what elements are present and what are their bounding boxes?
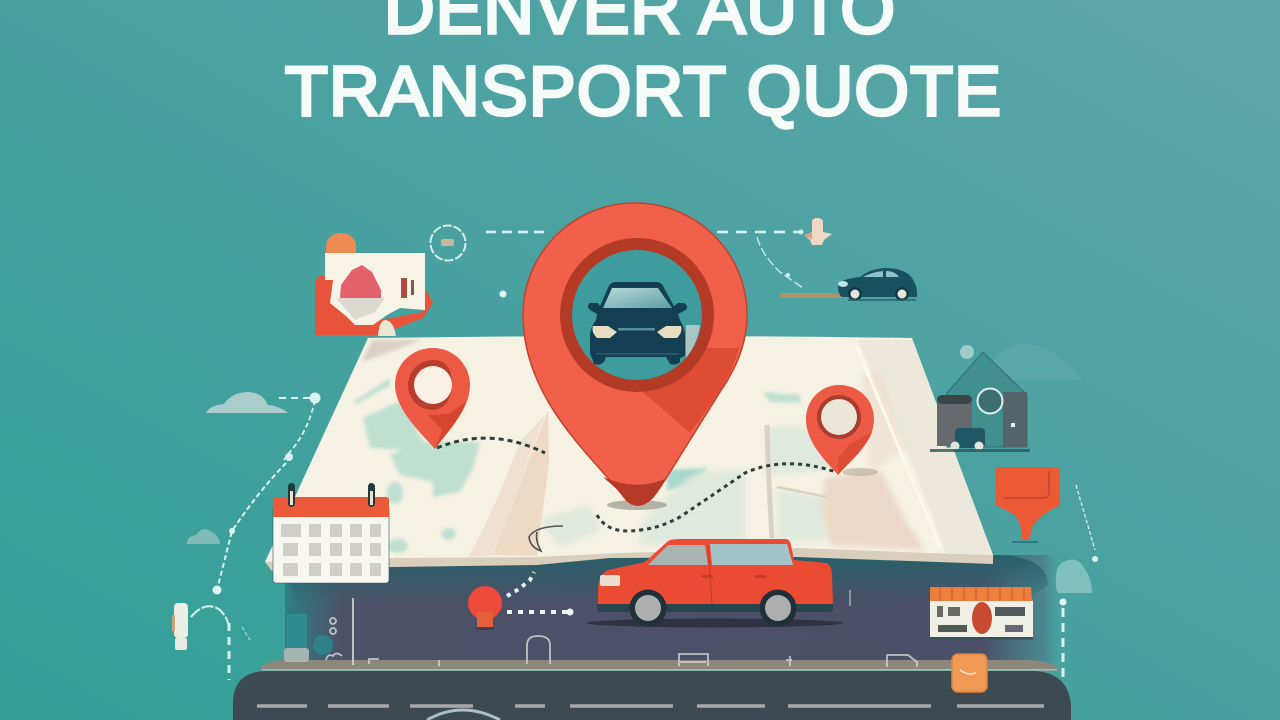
lower trim [597,604,833,612]
pin shaded fold [637,348,739,433]
icon: price sign [930,587,1033,640]
red car [587,539,843,628]
street area behind map [285,555,1060,663]
icon: illustrated card [315,233,433,336]
calendar rings [288,483,375,507]
icon: calendar [273,483,389,583]
wheel arc on road [427,710,500,720]
fold: tan strip [468,410,549,557]
map sheet [265,336,993,562]
calendar grid [281,524,381,576]
cloud lower left [187,529,220,544]
faded cloud [990,344,1082,380]
small mark on street right [849,590,851,606]
headlight [600,575,620,586]
fold shading left top [362,340,422,362]
small pin right [806,385,878,476]
wheels [630,590,666,626]
title: TRANSPORT QUOTE [285,52,1001,130]
icon: house with garage [930,344,1082,452]
pin tip shade [603,477,667,505]
dashed connector to road right [1060,598,1066,680]
pin shadow [842,468,878,476]
foreground road [233,671,1071,720]
icon: speech marker [995,467,1060,543]
icon: teal car [780,268,917,301]
car shadow [587,618,843,628]
dotted route left [437,438,545,453]
lane dashes [257,704,1044,708]
car windows [648,545,708,565]
red backing [315,275,433,335]
cream tab [378,320,396,336]
pin shadow [607,500,667,510]
tan map patches [822,370,925,550]
road furniture line icons [284,598,917,667]
title [285,0,1001,130]
left clouds and connectors [187,392,320,594]
pale green-grey map panels [540,427,832,548]
icon: hand marker [798,218,832,245]
right panel [857,340,993,555]
orange tab [326,233,356,253]
white card [325,253,425,325]
sidewalk strip [259,660,1062,670]
pin body [523,203,747,505]
map roads [767,347,940,547]
icon: orange box [952,654,987,692]
small pin left [395,348,470,449]
dot [500,290,506,298]
car body [598,539,833,605]
map edge thickness [265,540,993,571]
green map patches [353,378,800,553]
calendar header [273,497,389,517]
folded map [265,336,993,571]
cloud upper left [206,392,288,413]
pin opening [572,250,702,380]
icon: dashed circle [430,226,466,260]
big location pin [523,203,747,510]
car front view [588,282,687,365]
connector dashes top [486,232,803,288]
pin ring [560,238,714,392]
door handles [702,575,713,578]
dashed connector right [1076,485,1098,562]
calendar page [273,505,389,583]
icon: red street pin with dotted lines [468,572,574,630]
loop mark on map [529,526,563,551]
cloud right [1056,560,1092,593]
teal building silhouette at street left [287,614,307,660]
dotted route right [597,464,836,531]
icon: device with connector [172,603,250,680]
